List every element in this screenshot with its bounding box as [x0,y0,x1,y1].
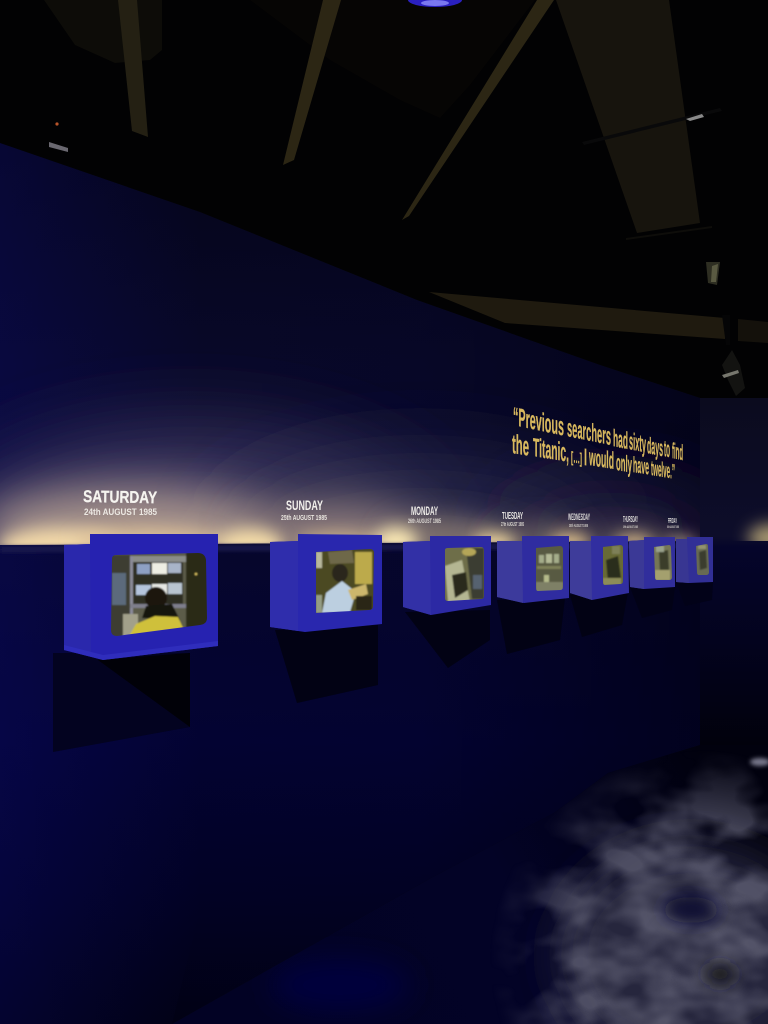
screen: control room [111,553,207,636]
ceiling panel right [556,0,700,233]
quote: […] [571,449,582,468]
floor [172,745,768,1024]
quote: searchers [567,414,611,451]
soft shadow line under glow [0,543,700,552]
exhibition wall scene: 29th AUGUST 1985 [623,524,638,529]
screen: close-up [654,545,672,580]
exhibition wall scene: WEDNESDAY [568,512,590,522]
label: Thursday [623,515,638,529]
label: Wednesday: 28th AUGUST 1985 [569,523,588,528]
exhibition wall scene: find [672,438,683,465]
exhibition wall scene: TUESDAY [502,511,523,522]
label: Sunday: 25th AUGUST 1985 [281,513,327,522]
monitor: Monday [403,536,491,615]
right side wall [700,398,768,745]
ceiling beam left [118,0,148,137]
lighting rig [582,108,745,396]
screen: technician [316,549,374,613]
exhibition wall scene: THURSDAY [623,515,638,524]
exhibition wall scene: 30th AUGUST 1985 [667,524,679,529]
screen: dark scene [696,544,709,575]
label: Wednesday [568,512,590,528]
label: Monday: MONDAY [411,506,438,518]
label: Saturday: 24th AUGUST 1985 [84,507,158,518]
quote: the [512,428,529,462]
lower ceiling soffit panel [429,292,725,339]
blue ceiling light [408,0,462,7]
quote: have [633,452,649,480]
monitor: Wednesday [570,536,629,600]
quote: Titanic, [533,432,569,468]
quote: sixty [629,428,646,458]
right wall glow [748,524,768,552]
monitor shadows [53,582,713,752]
quote: would [589,444,614,475]
label: Tuesday: 27th AUGUST 1985 [501,522,524,528]
label: Saturday: SATURDAY [83,487,158,507]
monitor: Thursday [629,537,675,589]
monitor: Friday [676,537,713,583]
wall darkening toward corner [0,143,700,1024]
ceiling structure [44,0,768,396]
label: Saturday [83,487,158,518]
exit sign [49,122,68,152]
ceiling panel centre [250,0,535,118]
quote: “Previous [513,401,564,441]
quote: only [616,449,632,478]
quote: to [664,435,670,462]
quote: days [647,432,663,461]
screen: submersible crew [603,545,623,585]
soffit panel right end [738,319,768,343]
monitor: Sunday [270,534,382,632]
ceiling beam right [402,0,554,220]
label: Monday: 26th AUGUST 1985 [408,519,441,525]
quote [512,401,683,484]
label: Sunday [281,497,327,522]
monitor: Tuesday [497,536,569,603]
wall left brightening [0,143,200,1024]
quote: had [613,425,628,455]
main blue wall [0,143,700,1024]
exhibition wall scene: twelve.” [651,457,675,484]
exhibition wall scene: FRIDAY [668,516,677,525]
ceiling panel upper left [44,0,162,63]
label: Friday [667,516,679,529]
ceiling beam centre [283,0,341,165]
screen: crew at controls [445,547,484,601]
label: Sunday: SUNDAY [286,497,323,513]
monitor: Saturday [64,534,218,660]
label: Tuesday [501,511,524,528]
screen: instrument panel [536,546,563,591]
wall light wash [0,390,700,545]
label: Monday [408,506,441,525]
quote: I [584,444,587,471]
